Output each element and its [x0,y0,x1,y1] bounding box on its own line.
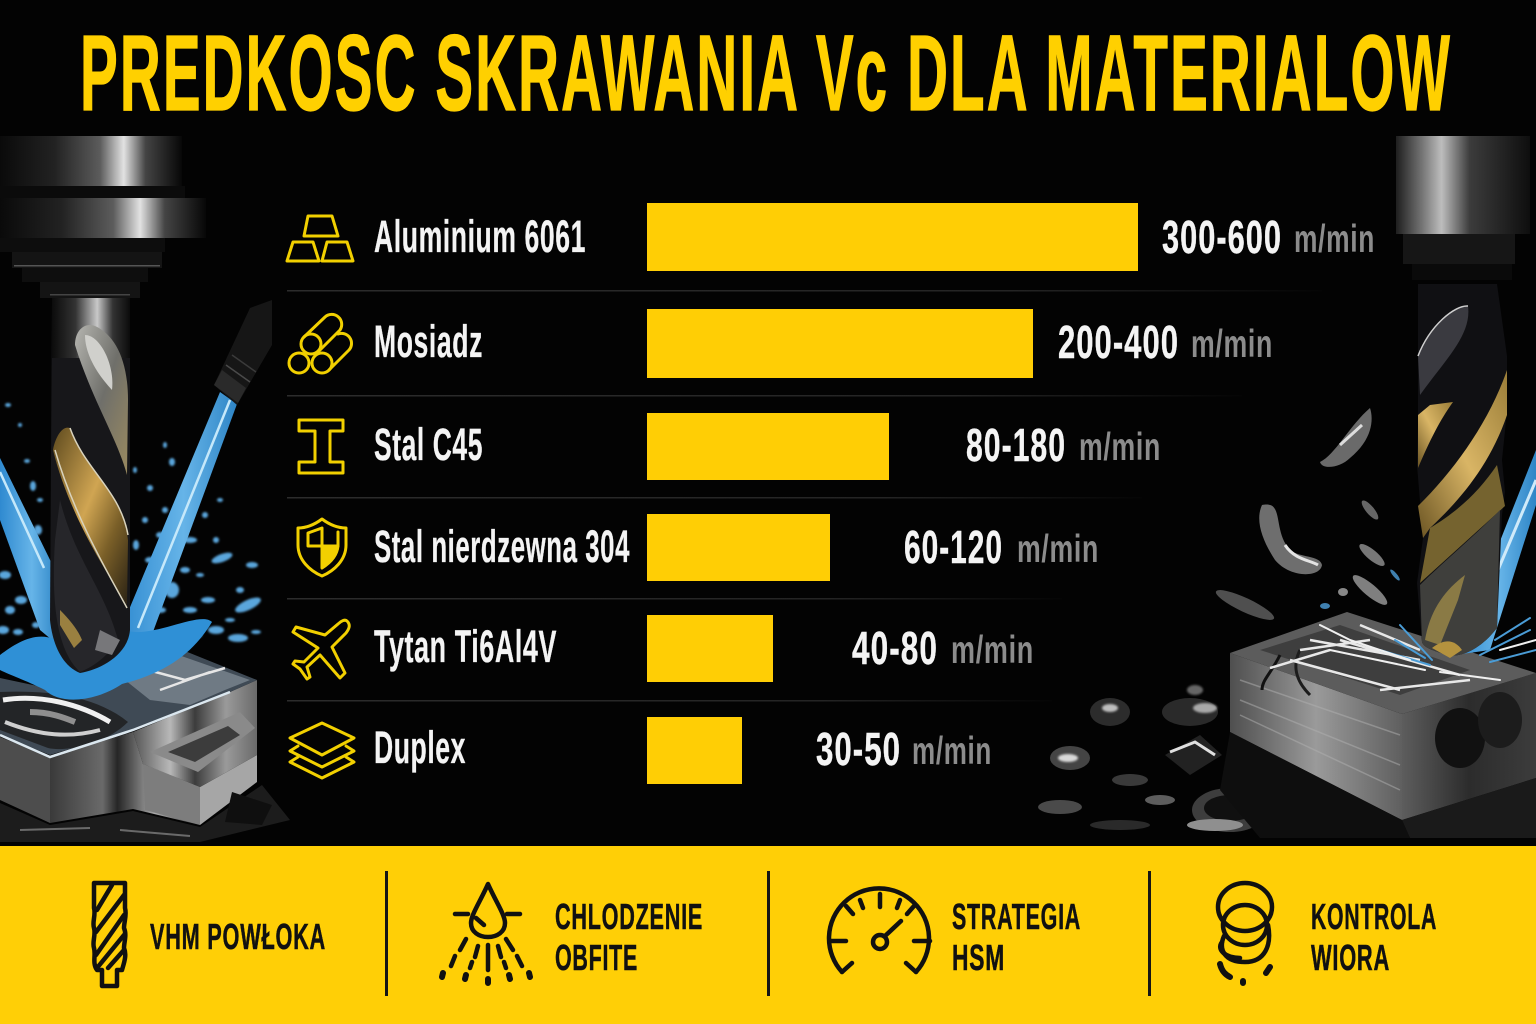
twist drill [1417,284,1507,658]
feature: HSM strategy [829,888,1081,978]
label: VHM POWŁOKA [150,916,326,957]
illustration: right drill with metal chips [1038,136,1536,838]
unit: m/min [1294,218,1375,261]
icon: ingots [287,216,353,261]
row: Mosiadz [289,309,1273,378]
icon: tubes [289,314,352,373]
spindle holder [0,136,206,298]
value: 300-600 [1162,211,1282,263]
label: Tytan Ti6Al4V [374,621,557,672]
label: Aluminium 6061 [374,211,586,262]
row dividers [287,290,1322,702]
row: Duplex [290,717,992,784]
bar [647,309,1033,378]
value: 80-180 [966,419,1066,471]
pile of chips [1038,685,1315,832]
bar [647,717,742,784]
flying chips [1213,408,1401,625]
bar [647,514,830,581]
bar [647,203,1138,271]
label line 2: WIORA [1311,937,1390,978]
label line 2: HSM [952,937,1005,978]
coolant jets [0,392,237,662]
coolant pool [0,619,212,700]
end mill [50,298,130,673]
label: KONTROLA [1311,896,1437,937]
bar [647,615,773,682]
row: Tytan Ti6Al4V [293,615,1034,682]
value: 40-80 [852,622,938,674]
unit: m/min [1079,426,1161,469]
coolant jet [1455,450,1536,655]
icon: gauge [829,888,930,972]
value: 60-120 [904,521,1003,573]
icon: drop and spray [442,884,530,983]
label: CHLODZENIE [555,896,703,937]
label: STRATEGIA [952,896,1081,937]
icon: airplane [293,620,349,679]
coolant spray droplets [0,403,263,649]
icon: chip coil [1218,883,1272,983]
unit: m/min [951,629,1034,672]
label: Stal nierdzewna 304 [374,521,630,572]
row: Aluminium 6061 [287,203,1375,271]
spindle holder [1396,136,1530,280]
bar [647,413,889,480]
feature: coolant [442,884,703,983]
label: Stal C45 [374,419,483,470]
impact sparks [1320,618,1536,680]
unit: m/min [1017,528,1099,571]
metal block [1220,612,1536,838]
row: Stal nierdzewna 304 [298,514,1099,581]
icon: I-beam [299,420,343,473]
unit: m/min [1191,323,1273,366]
icon: layers [290,723,354,778]
illustration: left milling tool with coolant [0,136,290,842]
icon: shield [298,519,346,576]
label: Mosiadz [374,316,483,367]
feature: VHM coating [93,883,326,986]
unit: m/min [912,730,992,773]
value: 30-50 [816,723,901,775]
label: Duplex [374,722,466,773]
value: 200-400 [1058,316,1179,368]
workpiece [0,645,290,842]
label line 2: OBFITE [555,937,638,978]
coolant nozzle [214,300,272,405]
row: Stal C45 [299,413,1161,480]
icon: drill [93,883,126,986]
footer band [0,846,1536,1024]
feature: chip control [1218,883,1437,983]
